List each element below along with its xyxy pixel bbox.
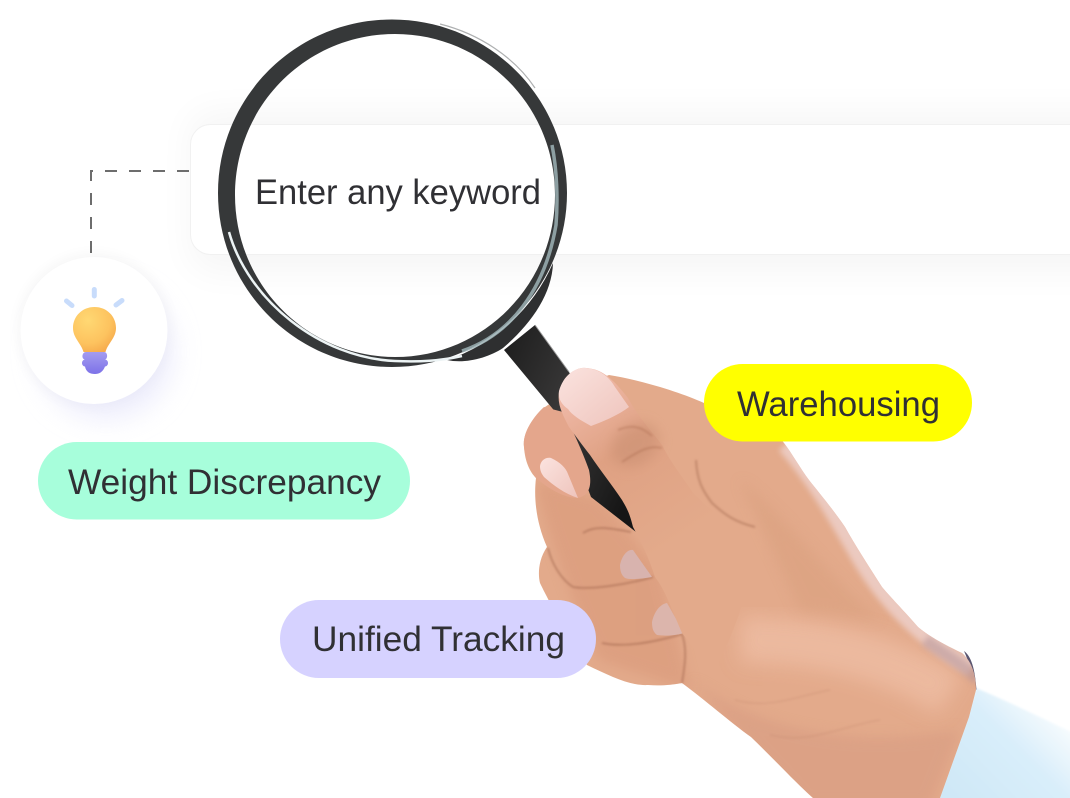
bulb base bbox=[82, 352, 108, 374]
wrist crease bbox=[735, 690, 880, 738]
thumb bbox=[559, 368, 749, 670]
rim highlight: lower left bbox=[229, 232, 462, 361]
thumb web fold bbox=[696, 460, 755, 527]
rim highlight: top bbox=[440, 24, 535, 88]
hand shading and highlights bbox=[535, 445, 978, 798]
dashed connector bbox=[91, 171, 190, 253]
pill: Warehousing: Warehousing bbox=[737, 385, 940, 424]
pill: Unified Tracking bbox=[280, 600, 596, 678]
index fingertip bbox=[524, 407, 590, 498]
highlight: hand centre bbox=[740, 640, 950, 695]
middle fingernail bbox=[620, 550, 652, 579]
badge circle bbox=[20, 257, 168, 404]
rear lens rim bbox=[447, 263, 553, 361]
highlight: back of hand edge bbox=[785, 445, 972, 668]
pill: Unified Tracking: Unified Tracking bbox=[312, 620, 565, 659]
bulb rays bbox=[66, 290, 122, 306]
rim highlight: lower right bbox=[462, 145, 557, 351]
thumb knuckle wrinkles bbox=[618, 427, 662, 462]
hand holding magnifier bbox=[504, 325, 1070, 798]
icon: lightbulb bbox=[66, 290, 122, 374]
hand and fingers bbox=[524, 375, 976, 798]
magnifying glass bbox=[218, 20, 567, 367]
lens rim bbox=[218, 20, 567, 367]
shade: wrist underside bbox=[714, 708, 948, 798]
cuff edge bbox=[964, 651, 976, 690]
wrist edge sheen bbox=[925, 640, 978, 680]
shade: fingers bbox=[542, 488, 686, 686]
finger crease lines bbox=[548, 528, 685, 683]
search box shadow bbox=[190, 112, 1070, 272]
search placeholder text: Enter any keyword bbox=[255, 173, 541, 212]
pill: Weight Discrepancy bbox=[38, 442, 410, 520]
index fingernail bbox=[540, 458, 578, 498]
badge shadow bbox=[40, 286, 172, 418]
thumb knuckle shading bbox=[602, 414, 668, 476]
pill: Weight Discrepancy: Weight Discrepancy bbox=[68, 463, 382, 502]
handle edge highlight bbox=[535, 325, 569, 372]
shade: back of hand bbox=[740, 480, 880, 620]
thumbnail bbox=[559, 368, 629, 426]
shirt sleeve bbox=[936, 688, 1070, 798]
lightbulb badge bbox=[17, 253, 172, 418]
badge soft halo bbox=[17, 253, 171, 407]
magnifier handle bbox=[504, 325, 640, 532]
bulb glass bbox=[73, 307, 116, 352]
search box bbox=[190, 124, 1070, 254]
ring fingernail bbox=[652, 603, 684, 636]
pill: Warehousing bbox=[704, 364, 972, 442]
